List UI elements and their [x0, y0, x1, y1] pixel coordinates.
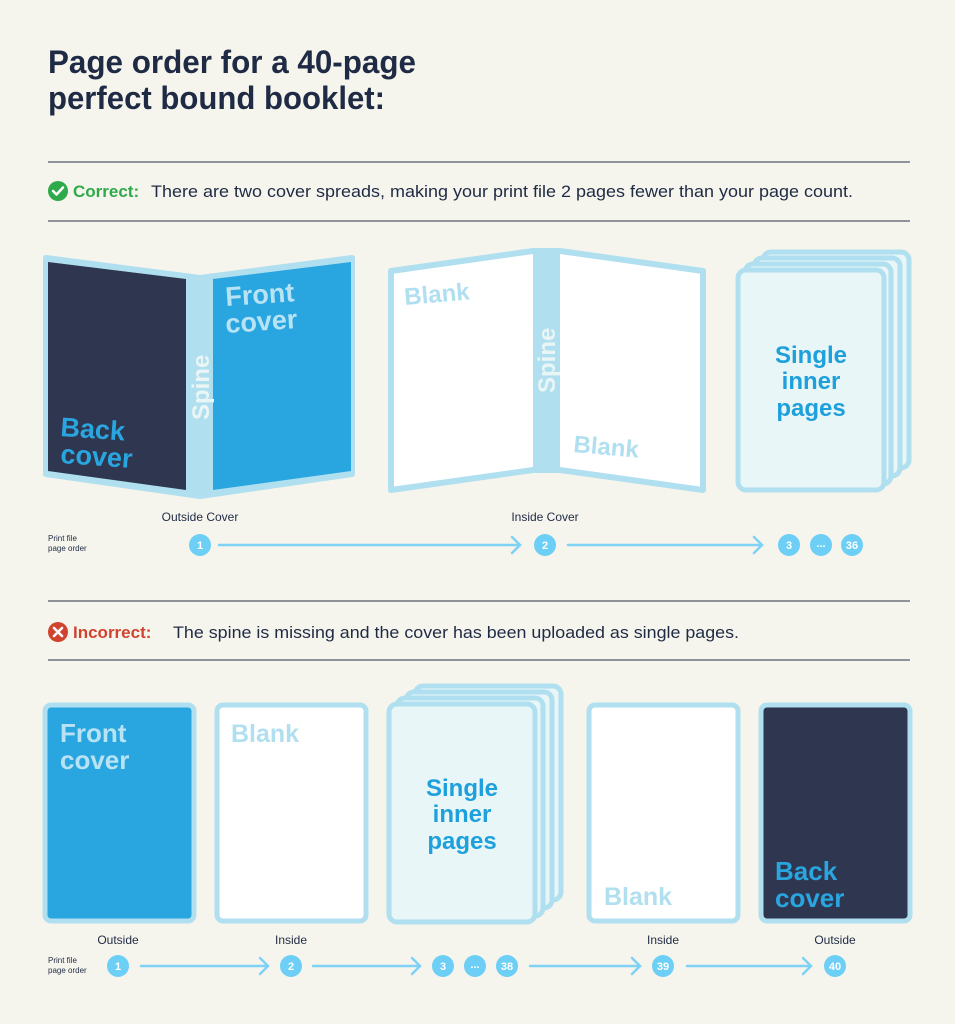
text: front cover — [224, 277, 299, 339]
correct heading: There are two cover spreads, making your print file 2 pages fewer than your page count. — [151, 182, 853, 201]
icon: check — [48, 181, 68, 201]
print file label: Print file — [48, 956, 77, 965]
timeline row 2: 2 — [288, 961, 294, 973]
correct heading: Correct: — [73, 182, 139, 201]
labels row 1 — [162, 510, 579, 524]
bottom: blank: Blank — [231, 720, 299, 748]
timeline row 1: 36 — [846, 540, 858, 552]
outside cover spread — [46, 258, 352, 496]
text: spine: Spine — [188, 355, 215, 420]
single inner pages stack: inner — [782, 368, 840, 395]
single inner pages stack: pages — [776, 395, 846, 422]
bottom: blank — [217, 705, 366, 921]
bottom: single inner pages stack: inner — [433, 801, 491, 828]
timeline row 2: 40 — [829, 961, 841, 973]
text: front cover: cover — [224, 304, 299, 339]
labels row 2 — [97, 933, 856, 947]
labels row 1: Inside Cover — [511, 510, 579, 524]
bottom: front cover: Front — [60, 718, 127, 748]
bottom: blank — [589, 705, 738, 921]
labels row 2: Inside — [275, 933, 307, 947]
timeline row 2: ... — [470, 959, 480, 971]
bottom: single inner pages stack — [389, 686, 561, 922]
bottom: front cover — [45, 705, 194, 921]
timeline row 1: ... — [816, 538, 826, 550]
bottom: front cover: cover — [60, 745, 129, 775]
print file label — [48, 956, 87, 975]
print file label: page order — [48, 966, 87, 975]
title: perfect bound booklet: — [48, 80, 385, 116]
timeline row 2: 38 — [501, 961, 513, 973]
timeline row 2: 1 — [115, 961, 121, 973]
timeline row 1 — [189, 534, 863, 556]
text: front cover: Front — [224, 277, 295, 312]
timeline row 2 — [107, 955, 846, 977]
timeline row 1: 2 — [542, 540, 548, 552]
single inner pages stack: Single — [775, 342, 847, 369]
title — [48, 44, 416, 116]
single inner pages stack — [738, 252, 909, 490]
text: blank: Blank — [572, 431, 641, 464]
print file label — [48, 534, 87, 553]
timeline row 2: 39 — [657, 961, 669, 973]
text: back cover — [60, 412, 134, 474]
labels row 2: Outside — [97, 933, 139, 947]
incorrect heading: Incorrect: — [73, 623, 151, 642]
bottom: blank: Blank — [604, 883, 672, 911]
inside cover spread — [391, 251, 703, 490]
bottom: back cover: Back — [775, 856, 838, 886]
title: Page order for a 40-page — [48, 44, 416, 80]
incorrect heading: The spine is missing and the cover has been uploaded as single pages. — [173, 623, 739, 642]
bottom: single inner pages stack: pages — [427, 828, 497, 855]
bottom: single inner pages stack: Single — [426, 775, 498, 802]
timeline row 1: 1 — [197, 540, 203, 552]
labels row 2: Outside — [814, 933, 856, 947]
print file label: Print file — [48, 534, 77, 543]
labels row 2: Inside — [647, 933, 679, 947]
print file label: page order — [48, 544, 87, 553]
text: back cover: cover — [60, 439, 134, 474]
text: back cover: Back — [60, 412, 127, 447]
text: blank: Blank — [403, 278, 471, 311]
bottom: back cover — [761, 705, 910, 921]
timeline row 1: 3 — [786, 540, 792, 552]
bottom: back cover: cover — [775, 883, 844, 913]
labels row 1: Outside Cover — [162, 510, 238, 524]
icon: x — [48, 622, 68, 642]
text: spine: Spine — [534, 328, 561, 393]
timeline row 2: 3 — [440, 961, 446, 973]
